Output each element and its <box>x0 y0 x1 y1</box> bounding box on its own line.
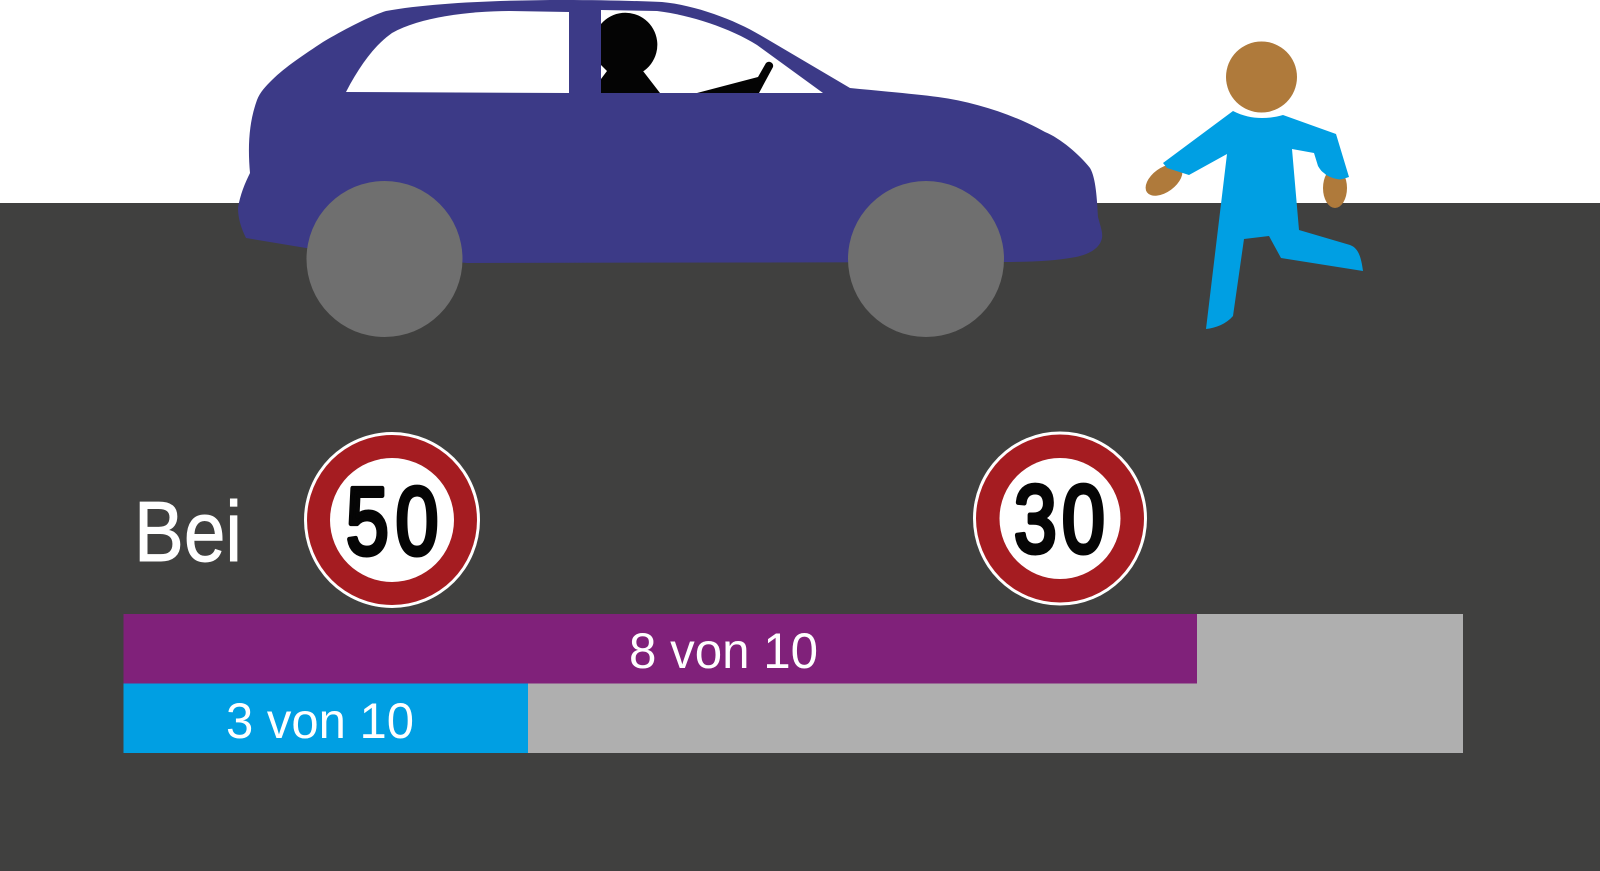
driver head <box>601 13 660 93</box>
bar fill <box>124 684 528 753</box>
right hand <box>1323 168 1347 208</box>
sign number 50: 50 <box>346 468 438 575</box>
sign border <box>304 432 480 608</box>
front wheel <box>848 181 1004 337</box>
bar track <box>124 614 1463 684</box>
rear window <box>346 11 569 93</box>
bar fill <box>124 614 1197 684</box>
pedestrian <box>1140 42 1363 329</box>
driver silhouette <box>601 13 773 93</box>
heading word: Bei: Bei <box>134 485 242 580</box>
blue clothing <box>1163 111 1363 329</box>
speed sign 50 <box>304 432 480 608</box>
car <box>238 0 1102 337</box>
speed sign 30 <box>973 432 1147 606</box>
sign border <box>973 432 1147 606</box>
left hand <box>1140 158 1188 202</box>
front window <box>601 10 823 93</box>
bar value: 3 von 10 <box>226 693 414 749</box>
driver arm and steering wheel <box>697 62 773 93</box>
road surface <box>0 203 1600 871</box>
bar: at 30 km/h <box>124 684 1463 753</box>
rear wheel <box>306 181 462 337</box>
bar: at 50 km/h <box>124 614 1463 684</box>
bar value: 8 von 10 <box>629 623 818 679</box>
head <box>1226 42 1297 112</box>
bar track <box>124 684 1463 753</box>
sign number 30: 30 <box>1014 466 1105 573</box>
car body <box>238 0 1102 263</box>
